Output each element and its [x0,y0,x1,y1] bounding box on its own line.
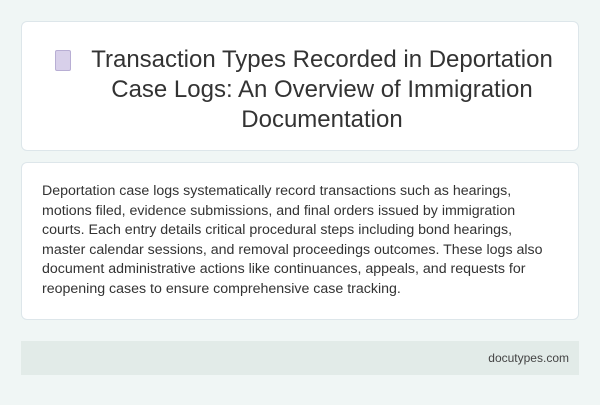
footer text: docutypes.com [488,351,569,365]
title: Transaction Types Recorded in Deportation Case Logs: An Overview of Immigration Documentation [91,46,553,133]
panel: title [21,21,579,151]
panel: description [21,162,579,320]
footer [21,341,579,375]
icon: document [55,50,71,71]
text block: Deportation case logs systematically record transactions such as hearings, motions filed, evidence submissions, and final orders issued by immigration courts. Each entry details critical procedural steps including bond hearings, master calendar sessions, and removal proceedings outcomes. These logs also document administrative actions like continuances, appeals, and requests for reopening cases to ensure comprehensive case tracking. [42,183,543,296]
